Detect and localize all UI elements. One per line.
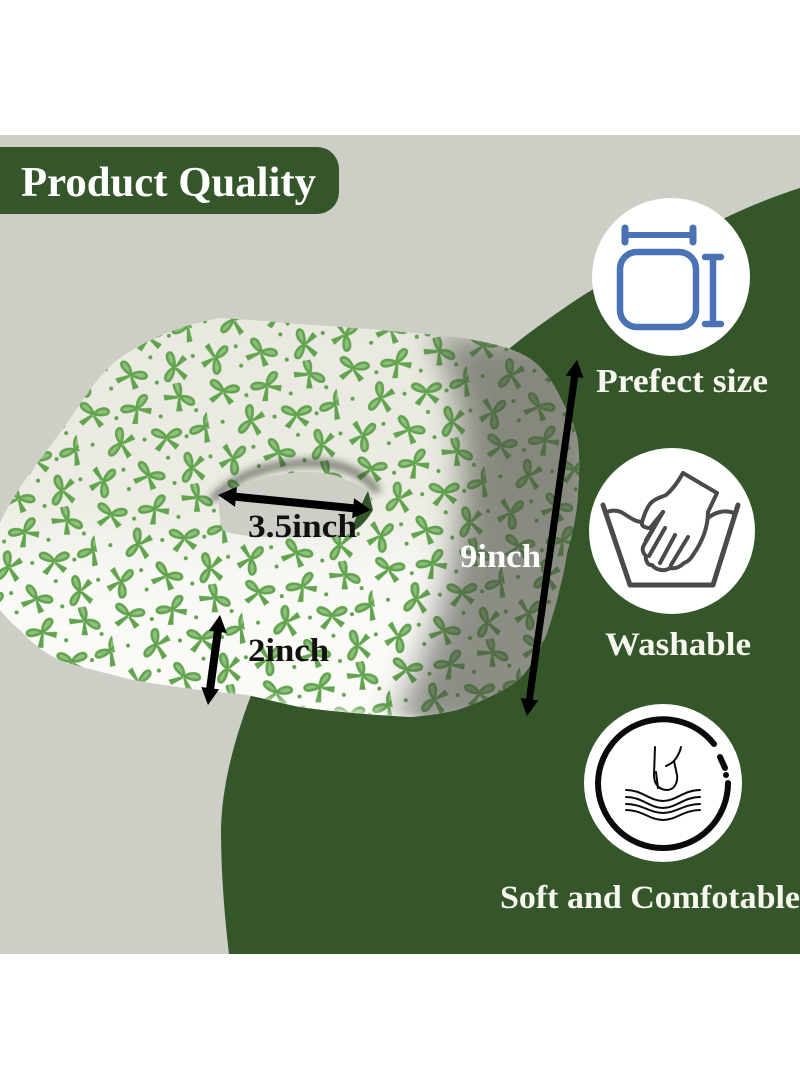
heading badge: Product Quality (0, 147, 339, 214)
icon: washable (589, 448, 755, 614)
pillow centre hole (219, 472, 373, 538)
arrow: hole width (218, 487, 371, 518)
donut pillow photo (0, 318, 580, 717)
caption: Soft and Comfotable: Soft and Comfotable (500, 880, 800, 916)
caption: Prefect size: Prefect size (596, 363, 768, 400)
label: 9inch: 9inch (460, 539, 541, 575)
icon: soft and comfortable (584, 704, 742, 862)
icon: perfect size (592, 198, 750, 356)
caption: Washable: Washable (605, 627, 751, 663)
label: 3.5inch: 3.5inch (248, 509, 357, 545)
label: 2inch: 2inch (248, 633, 329, 669)
green curved background panel (221, 188, 800, 954)
arrow: pillow height (201, 615, 227, 705)
grey backdrop panel (0, 135, 800, 954)
arrow: pillow length (520, 360, 584, 716)
heading badge: Product Quality: Product Quality (21, 160, 316, 206)
